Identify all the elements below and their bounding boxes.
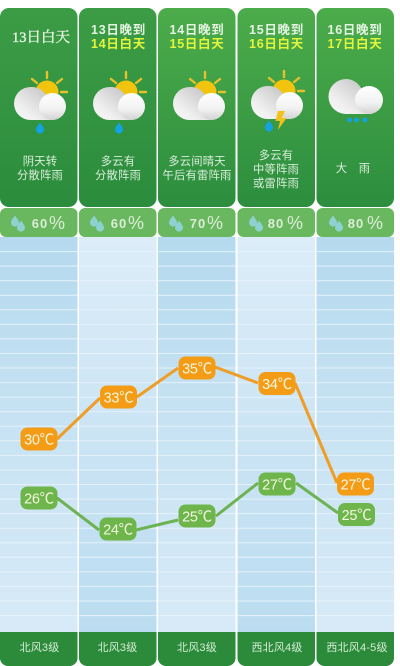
wind labels: 北风3级	[98, 641, 137, 654]
label 30: 30℃	[24, 432, 54, 448]
description	[253, 148, 299, 190]
date heading	[328, 22, 382, 51]
panel: day 2 header	[79, 8, 156, 207]
date heading: 16日白天	[249, 36, 304, 51]
icon: sun, cloud and rain	[14, 72, 67, 134]
label 24	[100, 518, 136, 540]
rain chance day 3: %	[207, 213, 223, 233]
date heading: 15日白天	[170, 36, 224, 51]
rain chance day 3	[169, 213, 223, 233]
label 35	[178, 356, 216, 380]
icon: sun, cloud and rain	[93, 72, 146, 134]
panel: day 3 header	[158, 8, 236, 207]
description	[163, 154, 231, 182]
description	[95, 154, 141, 182]
chart: high temperature line	[20, 356, 374, 496]
rain chance day 2: %	[128, 213, 144, 233]
label 33	[100, 386, 137, 408]
rain chance day 4: 80	[268, 216, 284, 231]
description	[17, 154, 63, 182]
icon: cloud and heavy rain	[328, 79, 383, 122]
rain chance day 1: %	[49, 213, 65, 233]
rain chance day 5: %	[367, 213, 383, 233]
description: 多云有	[259, 148, 293, 162]
description: 分散阵雨	[17, 168, 63, 182]
label 25: 25℃	[342, 508, 371, 524]
label 27	[337, 472, 374, 496]
date heading: 17日白天	[328, 36, 382, 51]
label 35: 35℃	[182, 362, 212, 378]
rain chance day 1	[11, 213, 65, 233]
description: 午后有雷阵雨	[163, 168, 231, 182]
icon: sun, cloud, lightning and rain	[251, 71, 304, 132]
label 25	[338, 503, 375, 526]
chart: low temperature line	[20, 472, 375, 540]
wind labels: 北风3级	[177, 641, 217, 654]
rain chance day 5	[329, 213, 383, 233]
date heading	[170, 22, 224, 51]
rain chance day 2: 60	[111, 216, 127, 231]
rain chance day 2	[90, 213, 144, 233]
date heading	[91, 22, 146, 51]
icon: sun and cloud	[173, 72, 225, 120]
label 30	[20, 428, 58, 450]
date heading: 14日白天	[91, 36, 146, 51]
label 33: 33℃	[104, 390, 133, 406]
date heading: 13日白天	[12, 29, 70, 46]
wind labels: 北风3级	[20, 641, 59, 654]
panel: day 1 header	[0, 8, 78, 207]
label 27: 27℃	[262, 478, 292, 494]
date heading: 15日晚到	[249, 22, 304, 37]
rain chance day 3: 70	[190, 216, 206, 231]
description: 或雷阵雨	[253, 176, 299, 190]
wind labels	[20, 641, 388, 654]
panel: temperature chart background	[0, 237, 394, 633]
date heading: 14日晚到	[170, 22, 224, 37]
description: 多云有	[101, 154, 135, 168]
rain chance day 4: %	[287, 213, 303, 233]
panel: rain probability row	[0, 208, 394, 237]
label 24: 24℃	[103, 522, 133, 538]
panel: day 5 header	[316, 8, 394, 207]
label 34: 34℃	[262, 377, 292, 393]
description: 阴天转	[23, 154, 57, 168]
date heading	[249, 22, 304, 51]
date heading: 13日晚到	[91, 22, 146, 37]
date heading: 16日晚到	[328, 22, 382, 37]
label 27	[258, 472, 296, 496]
description: 大 雨	[336, 161, 370, 175]
description: 中等阵雨	[253, 162, 299, 176]
rain chance day 5: 80	[348, 216, 364, 231]
panel: day 4 header	[238, 8, 315, 207]
label 26: 26℃	[24, 492, 54, 508]
label 27: 27℃	[341, 478, 370, 494]
description: 多云间晴天	[168, 154, 226, 168]
rain chance day 1: 60	[32, 216, 48, 231]
wind labels: 西北风4级	[251, 641, 303, 654]
label 34	[258, 372, 296, 395]
label 25: 25℃	[182, 510, 212, 526]
panel: wind row	[0, 632, 394, 666]
label 25	[178, 504, 216, 528]
wind labels: 西北风4-5级	[326, 641, 388, 654]
description: 分散阵雨	[95, 168, 141, 182]
label 26	[20, 486, 58, 510]
rain chance day 4	[249, 213, 303, 233]
